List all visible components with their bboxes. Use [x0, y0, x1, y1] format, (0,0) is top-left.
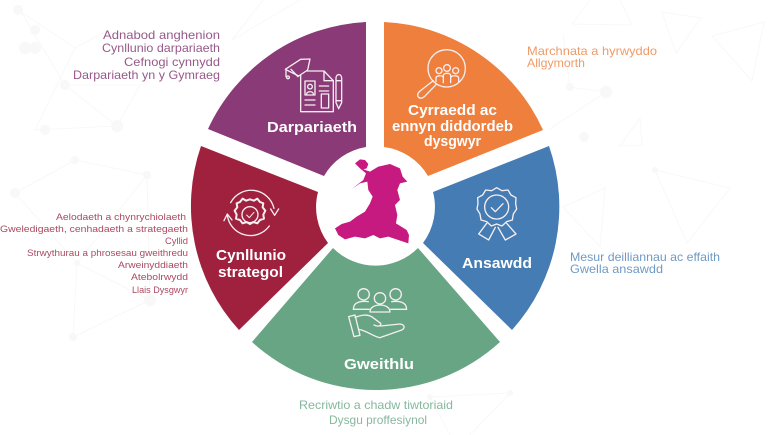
segment: Cyrraedd: [384, 22, 543, 176]
text: Cynllunio strategol topics: Strwythurau a phrosesau gweithredu: [27, 248, 188, 259]
icon: map of Wales: [335, 159, 409, 243]
label: Ansawdd: Ansawdd: [462, 255, 532, 272]
text: Cyrraedd topics: [527, 44, 657, 70]
text: Ansawdd topics: Mesur deilliannau ac effaith: [570, 250, 720, 264]
panel: Gweithlu: [252, 248, 500, 390]
icon: magnifying glass with people: [418, 50, 465, 98]
label: Cyrraedd ac ennyn diddordeb dysgwyr: dysgwyr: [424, 133, 481, 150]
text: Cynllunio strategol topics: Atebolrwydd: [131, 272, 188, 283]
text: Darpariaeth topics: Cefnogi cynnydd: [124, 55, 220, 69]
segment: Ansawdd: [423, 146, 559, 330]
label: Cynllunio strategol: [216, 247, 286, 281]
icon: hand holding people: [349, 289, 407, 338]
panel: Ansawdd: [423, 146, 559, 330]
segment: Cynllunio strategol: [191, 146, 328, 330]
label: Cynllunio strategol: Cynllunio: [216, 247, 286, 264]
segment: Gweithlu: [252, 248, 500, 390]
text: Gweithlu topics: Recriwtio a chadw tiwtoriaid: [299, 398, 453, 412]
icon: gear with circular arrows: [224, 190, 279, 236]
text: Cynllunio strategol topics: Llais Dysgwyr: [132, 285, 188, 296]
text: Cynllunio strategol topics: Gweledigaeth, cenhadaeth a strategaeth: [0, 224, 188, 235]
text: Darpariaeth topics: Darpariaeth yn y Gymraeg: [73, 68, 220, 82]
icon: document, graduation cap and pencil: [285, 59, 342, 112]
text: Cynllunio strategol topics: Cyllid: [165, 236, 188, 247]
panel: Cynllunio strategol: [191, 146, 328, 330]
text: Cynllunio strategol topics: [0, 212, 188, 296]
text: Cynllunio strategol topics: Aelodaeth a chynrychiolaeth: [56, 212, 186, 223]
label: Cyrraedd ac ennyn diddordeb dysgwyr: [392, 102, 513, 150]
panel: Cyrraedd ac ennyn diddordeb dysgwyr: [384, 22, 543, 176]
text: Ansawdd topics: Gwella ansawdd: [570, 262, 663, 276]
segment: Darpariaeth: [208, 22, 366, 176]
text: Cyrraedd topics: Marchnata a hyrwyddo: [527, 44, 657, 58]
text: Gweithlu topics: Dysgu proffesiynol: [329, 413, 427, 427]
label: Darpariaeth: Darpariaeth: [267, 119, 357, 136]
text: Gweithlu topics: [299, 398, 453, 427]
icon: rosette badge with tick: [477, 188, 517, 240]
text: Darpariaeth topics: [73, 28, 220, 82]
text: Cynllunio strategol topics: Arweinyddiaeth: [118, 260, 188, 271]
text: Cyrraedd topics: Allgymorth: [527, 56, 585, 70]
label: Gweithlu: Gweithlu: [344, 356, 414, 373]
text: Ansawdd topics: [570, 250, 720, 276]
panel: Darpariaeth: [208, 22, 366, 176]
label: Cyrraedd ac ennyn diddordeb dysgwyr: Cyrraedd ac: [408, 102, 497, 119]
label: Cyrraedd ac ennyn diddordeb dysgwyr: ennyn diddordeb: [392, 118, 513, 135]
text: Darpariaeth topics: Cynllunio darpariaeth: [102, 41, 220, 55]
text: Darpariaeth topics: Adnabod anghenion: [103, 28, 220, 42]
label: Cynllunio strategol: strategol: [218, 264, 283, 281]
